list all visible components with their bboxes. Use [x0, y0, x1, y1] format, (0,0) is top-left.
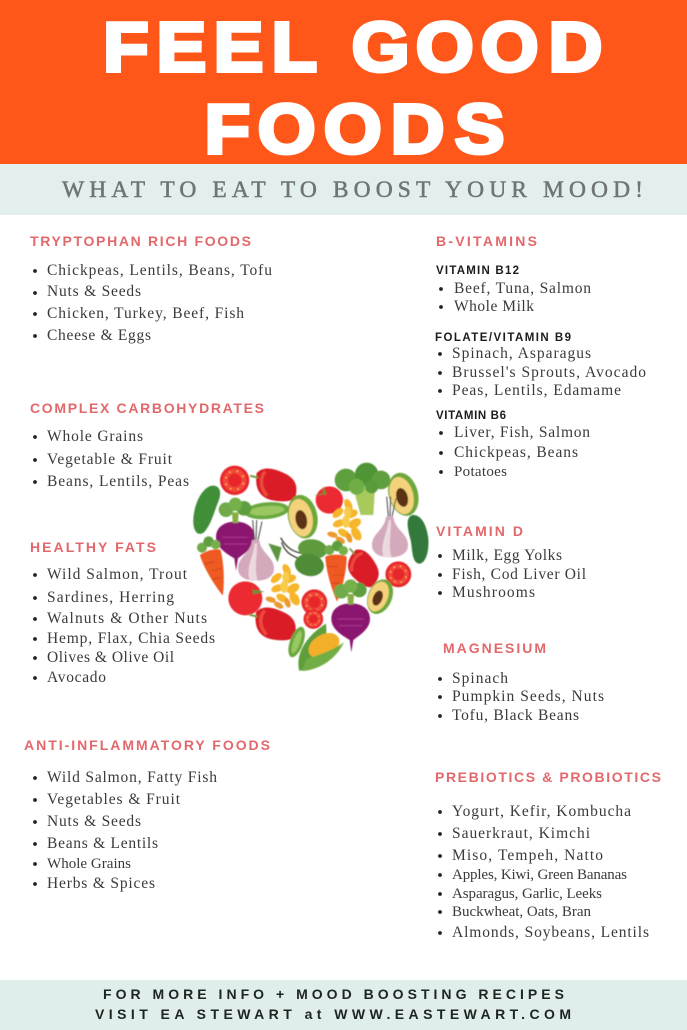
- subtitle band: [0, 164, 687, 215]
- list: healthy fats: Sardines, Herring: [47, 589, 174, 606]
- list: prebiotics and probiotics: Miso, Tempeh, Natto: [452, 847, 603, 864]
- heading: anti-inflammatory: ANTI-INFLAMMATORY FOODS: [24, 737, 270, 753]
- subtitle: WHAT TO EAT TO BOOST YOUR MOOD!: [62, 177, 643, 203]
- subheading: vitamin b6: VITAMIN B6: [436, 410, 506, 422]
- list: prebiotics and probiotics: Apples, Kiwi, Green Bananas: [452, 867, 627, 883]
- list: vitamin d: Fish, Cod Liver Oil: [452, 566, 586, 583]
- icon: pea pod: [285, 625, 308, 659]
- icon: corn: [298, 624, 344, 671]
- list: anti-inflammatory foods: Vegetables & Fruit: [47, 791, 181, 808]
- list: anti-inflammatory foods: Wild Salmon, Fatty Fish: [47, 769, 217, 786]
- icon: red pepper: [337, 543, 387, 590]
- list: healthy fats: Hemp, Flax, Chia Seeds: [47, 630, 215, 647]
- list: vitamin b12: [439, 280, 591, 315]
- icon: garlic: [372, 497, 408, 557]
- heading: vitamin d: VITAMIN D: [436, 523, 523, 539]
- list: carbohydrates: [33, 428, 189, 490]
- icon: tomato slice: [301, 589, 327, 615]
- list: folate: Brussel's Sprouts, Avocado: [452, 364, 646, 381]
- list: magnesium: [438, 670, 604, 724]
- list: carbohydrates: Vegetable & Fruit: [47, 451, 173, 468]
- subheading: folate: FOLATE/VITAMIN B9: [435, 332, 571, 344]
- list: healthy fats: Avocado: [47, 669, 106, 686]
- list: prebiotics and probiotics: Yogurt, Kefir, Kombucha: [452, 803, 631, 820]
- list: anti-inflammatory foods: Herbs & Spices: [47, 875, 155, 892]
- list: vitamin b6: Chickpeas, Beans: [454, 444, 578, 461]
- footer band: [0, 980, 687, 1030]
- icon: olives: [268, 537, 329, 578]
- list: prebiotics and probiotics: Buckwheat, Oats, Bran: [452, 904, 592, 920]
- panel: prebiotics and probiotics: [435, 769, 661, 941]
- list: healthy fats: [33, 566, 215, 686]
- panel: b-vitamins: [435, 233, 646, 480]
- icon: red pepper: [249, 607, 296, 640]
- list: tryptophan foods: Chicken, Turkey, Beef, Fish: [47, 305, 244, 322]
- icon: red pepper: [250, 468, 296, 501]
- list: magnesium: Tofu, Black Beans: [452, 707, 579, 724]
- list: vitamin d: Mushrooms: [452, 584, 535, 601]
- panel: magnesium: [438, 640, 604, 724]
- list: folate: [438, 345, 646, 399]
- list: anti-inflammatory foods: Beans & Lentils: [47, 835, 158, 852]
- panel: tryptophan rich foods: [30, 233, 272, 344]
- icon: carrot: [195, 534, 233, 599]
- icon: beet: [331, 579, 370, 652]
- list: vitamin b12: Whole Milk: [454, 298, 534, 315]
- list: carbohydrates: Beans, Lentils, Peas: [47, 473, 189, 490]
- list: tryptophan foods: Chickpeas, Lentils, Beans, Tofu: [47, 262, 272, 279]
- list: tryptophan foods: [33, 262, 272, 344]
- list: vitamin b6: Liver, Fish, Salmon: [454, 424, 590, 441]
- icon: avocado: [284, 492, 322, 541]
- list: anti-inflammatory foods: Whole Grains: [47, 856, 131, 872]
- heart of vegetables illustration: [193, 463, 428, 671]
- icon: carrot: [324, 541, 348, 602]
- list: tryptophan foods: Cheese & Eggs: [47, 327, 151, 344]
- list: vitamin b12: Beef, Tuna, Salmon: [454, 280, 591, 297]
- icon: golden grains: [327, 498, 364, 545]
- icon: avocado: [362, 575, 398, 618]
- list: vitamin b6: [439, 424, 590, 480]
- list: healthy fats: Wild Salmon, Trout: [47, 566, 188, 583]
- heading: healthy fats: HEALTHY FATS: [30, 539, 156, 555]
- panel: complex carbohydrates: [30, 400, 264, 490]
- heading: prebiotics and probiotics: PREBIOTICS & PROBIOTICS: [435, 769, 661, 785]
- icon: cucumber: [408, 515, 428, 564]
- list: vitamin b6: Potatoes: [454, 464, 507, 480]
- list: folate: Peas, Lentils, Edamame: [452, 382, 621, 399]
- heading: b-vitamins: B-VITAMINS: [436, 233, 537, 249]
- list: prebiotics and probiotics: [438, 803, 649, 941]
- title line: FEEL GOOD: FEEL GOOD: [103, 9, 602, 87]
- panel: healthy fats: [30, 539, 215, 686]
- icon: golden grains: [265, 563, 302, 610]
- list: vitamin d: Milk, Egg Yolks: [452, 547, 562, 564]
- list: magnesium: Pumpkin Seeds, Nuts: [452, 688, 604, 705]
- icon: tomato: [313, 486, 343, 514]
- icon: pea pod: [243, 500, 290, 521]
- list: prebiotics and probiotics: Asparagus, Garlic, Leeks: [452, 886, 602, 902]
- footer line: more info: FOR MORE INFO + MOOD BOOSTING RECIPES: [103, 986, 564, 1002]
- list: anti-inflammatory foods: Nuts & Seeds: [47, 813, 141, 830]
- icon: tomato slice: [220, 466, 249, 495]
- heading: complex carbohydrates: COMPLEX CARBOHYDRATES: [30, 400, 264, 416]
- icon: cucumber: [193, 486, 220, 534]
- icon: tomato slice: [304, 609, 323, 629]
- list: folate: Spinach, Asparagus: [452, 345, 591, 362]
- panel: vitamin d: [436, 523, 586, 601]
- subheading: vitamin b12: VITAMIN B12: [436, 265, 519, 277]
- icon: beet: [216, 498, 255, 571]
- list: prebiotics and probiotics: Almonds, Soybeans, Lentils: [452, 924, 649, 941]
- list: vitamin d: [438, 547, 586, 601]
- title line: FOODS: FOODS: [205, 91, 504, 169]
- list: prebiotics and probiotics: Sauerkraut, Kimchi: [452, 825, 591, 842]
- icon: avocado: [383, 469, 423, 519]
- icon: garlic: [238, 520, 274, 581]
- list: carbohydrates: Whole Grains: [47, 428, 143, 445]
- heading: tryptophan: TRYPTOPHAN RICH FOODS: [30, 233, 251, 249]
- panel: anti-inflammatory foods: [24, 737, 270, 892]
- icon: tomato: [228, 579, 265, 615]
- footer line: website: VISIT EA STEWART at WWW.EASTEWART.COM: [95, 1006, 571, 1022]
- list: healthy fats: Walnuts & Other Nuts: [47, 610, 207, 627]
- list: magnesium: Spinach: [452, 670, 508, 687]
- list: anti-inflammatory foods: [33, 769, 217, 892]
- list: tryptophan foods: Nuts & Seeds: [47, 283, 141, 300]
- title banner: [0, 0, 687, 169]
- icon: tomato slice: [385, 561, 411, 587]
- list: healthy fats: Olives & Olive Oil: [47, 649, 174, 666]
- heading: magnesium: MAGNESIUM: [443, 640, 546, 656]
- icon: broccoli: [335, 463, 390, 515]
